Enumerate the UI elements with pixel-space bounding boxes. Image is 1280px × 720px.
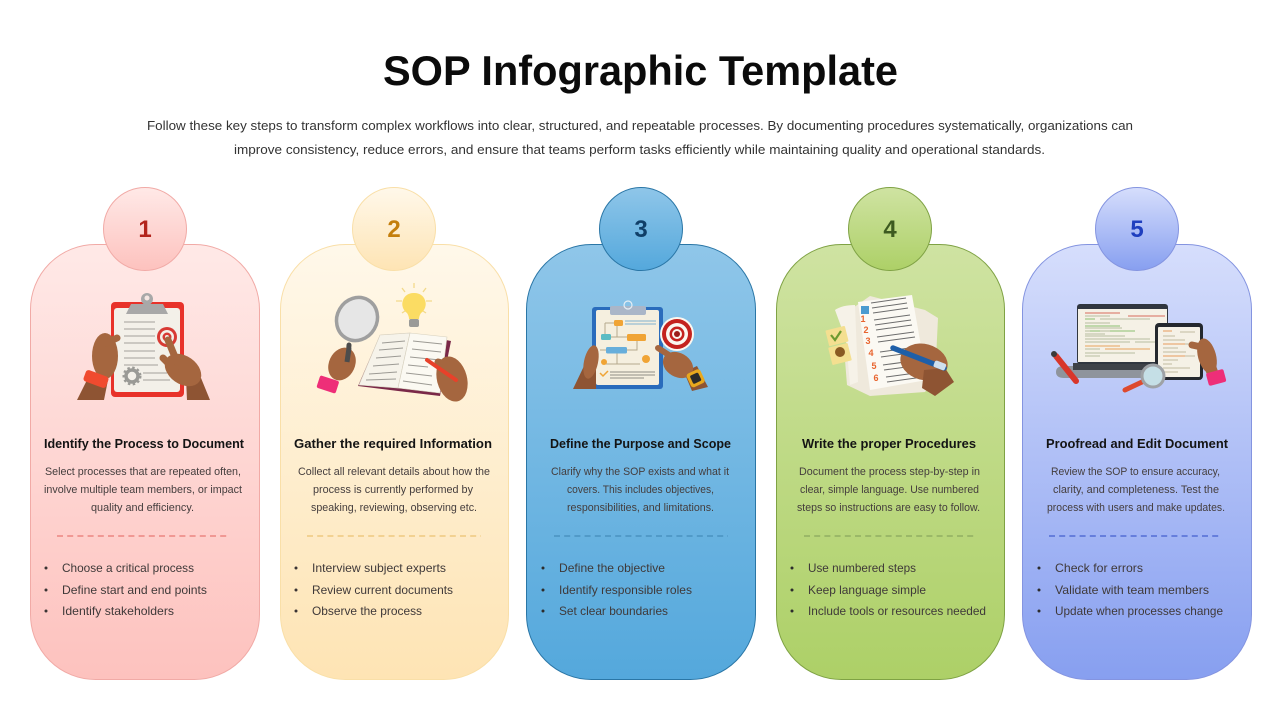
heading 3: Define the Purpose and Scope [550, 436, 731, 451]
heading 2: Gather the required Information [294, 436, 492, 451]
icon: clipboard with target and hands [77, 293, 210, 400]
icon: numbered document stack with writing hand: 5 [871, 361, 877, 371]
icon: numbered document stack with writing hand: 4 [868, 348, 874, 358]
icon: laptop, tablet, pen and magnifier [1051, 304, 1227, 390]
number badge 4 [848, 188, 932, 270]
bullet list 2: Observe the process [312, 604, 422, 618]
description 3: Clarify why the SOP exists and what it [551, 466, 729, 478]
card background 5 [1022, 244, 1252, 680]
number badge 1: 1 [138, 216, 152, 243]
bullet list 2: Review current documents [312, 583, 453, 597]
bullet list 5: Validate with team members [1055, 583, 1209, 597]
description 1: involve multiple team members, or impact [44, 484, 242, 496]
number badge 5: 5 [1130, 216, 1144, 243]
description 1 [44, 466, 242, 514]
description 5: process with users and make updates. [1047, 502, 1225, 514]
icon: numbered document stack with writing hand [825, 295, 954, 396]
description 5: clarity, and completeness. Test the [1053, 484, 1219, 496]
icon: numbered document stack with writing hand: 3 [865, 336, 871, 346]
description 4 [797, 466, 980, 514]
bullet list 3: Set clear boundaries [559, 604, 668, 618]
bullet list 4 [790, 561, 986, 618]
intro paragraph: Follow these key steps to transform complex workflows into clear, structured, and repeatable processes. By documenting procedures systematically, organizations can [147, 118, 1133, 133]
bullet list 2: Interview subject experts [312, 561, 446, 575]
panel: step 2 [280, 188, 508, 680]
description 4: Document the process step-by-step in [799, 466, 980, 478]
description 3: covers. This includes objectives, [567, 484, 714, 496]
number badge 2 [352, 188, 436, 270]
description 3: responsibilities, and limitations. [567, 502, 714, 514]
icon: numbered document stack with writing hand: 1 [860, 314, 866, 324]
bullet list 1 [44, 561, 207, 618]
panel: step 5 [1022, 188, 1252, 680]
heading 5: Proofread and Edit Document [1046, 436, 1229, 451]
intro paragraph: improve consistency, reduce errors, and ensure that teams perform tasks efficiently while maintaining quality and operational standards. [234, 142, 1045, 157]
number badge 3: 3 [634, 216, 648, 243]
bullet list 3 [542, 561, 692, 618]
description 2 [298, 466, 490, 514]
icon: numbered document stack with writing hand: 6 [873, 373, 879, 383]
icon: flowchart clipboard with target and hands [573, 301, 708, 391]
description 2: speaking, reviewing, observing etc. [311, 502, 477, 514]
heading 4: Write the proper Procedures [802, 436, 976, 451]
bullet list 2 [294, 561, 453, 618]
icon: numbered document stack with writing hand: 2 [863, 325, 869, 335]
intro paragraph [147, 118, 1133, 157]
bullet list 1: Identify stakeholders [62, 604, 174, 618]
panel: step 3 [526, 188, 756, 680]
title: SOP Infographic Template [383, 47, 898, 94]
icon: magnifier, lightbulb, open book and hands [316, 283, 472, 405]
card background 1 [30, 244, 260, 680]
bullet list 1: Choose a critical process [62, 561, 194, 575]
number badge 2: 2 [387, 216, 401, 243]
card background 3 [526, 244, 756, 680]
bullet list 4: Use numbered steps [808, 561, 916, 575]
number badge 4: 4 [883, 216, 897, 243]
card background 2 [280, 244, 508, 680]
number badge 1 [104, 188, 186, 270]
bullet list 3: Identify responsible roles [559, 583, 692, 597]
description 1: quality and efficiency. [91, 502, 194, 514]
bullet list 4: Keep language simple [808, 583, 926, 597]
description 1: Select processes that are repeated often, [45, 466, 241, 478]
bullet list 1: Define start and end points [62, 583, 207, 597]
number badge 5 [1096, 188, 1178, 270]
description 5: Review the SOP to ensure accuracy, [1051, 466, 1220, 478]
bullet list 5: Check for errors [1055, 561, 1143, 575]
description 2: process is currently performed by [313, 484, 473, 496]
number badge 3 [600, 188, 682, 270]
description 3 [551, 466, 729, 514]
panel: step 1 [30, 188, 260, 680]
card background 4 [776, 244, 1004, 680]
heading 1: Identify the Process to Document [44, 436, 245, 451]
bullet list 5 [1038, 561, 1223, 618]
description 2: Collect all relevant details about how the [298, 466, 490, 478]
panel: step 4 [776, 188, 1004, 680]
description 4: clear, simple language. Use numbered [800, 484, 979, 496]
bullet list 4: Include tools or resources needed [808, 604, 986, 618]
bullet list 5: Update when processes change [1055, 604, 1223, 618]
description 4: steps so instructions are easy to follow. [797, 502, 980, 514]
description 5 [1047, 466, 1225, 514]
bullet list 3: Define the objective [559, 561, 665, 575]
